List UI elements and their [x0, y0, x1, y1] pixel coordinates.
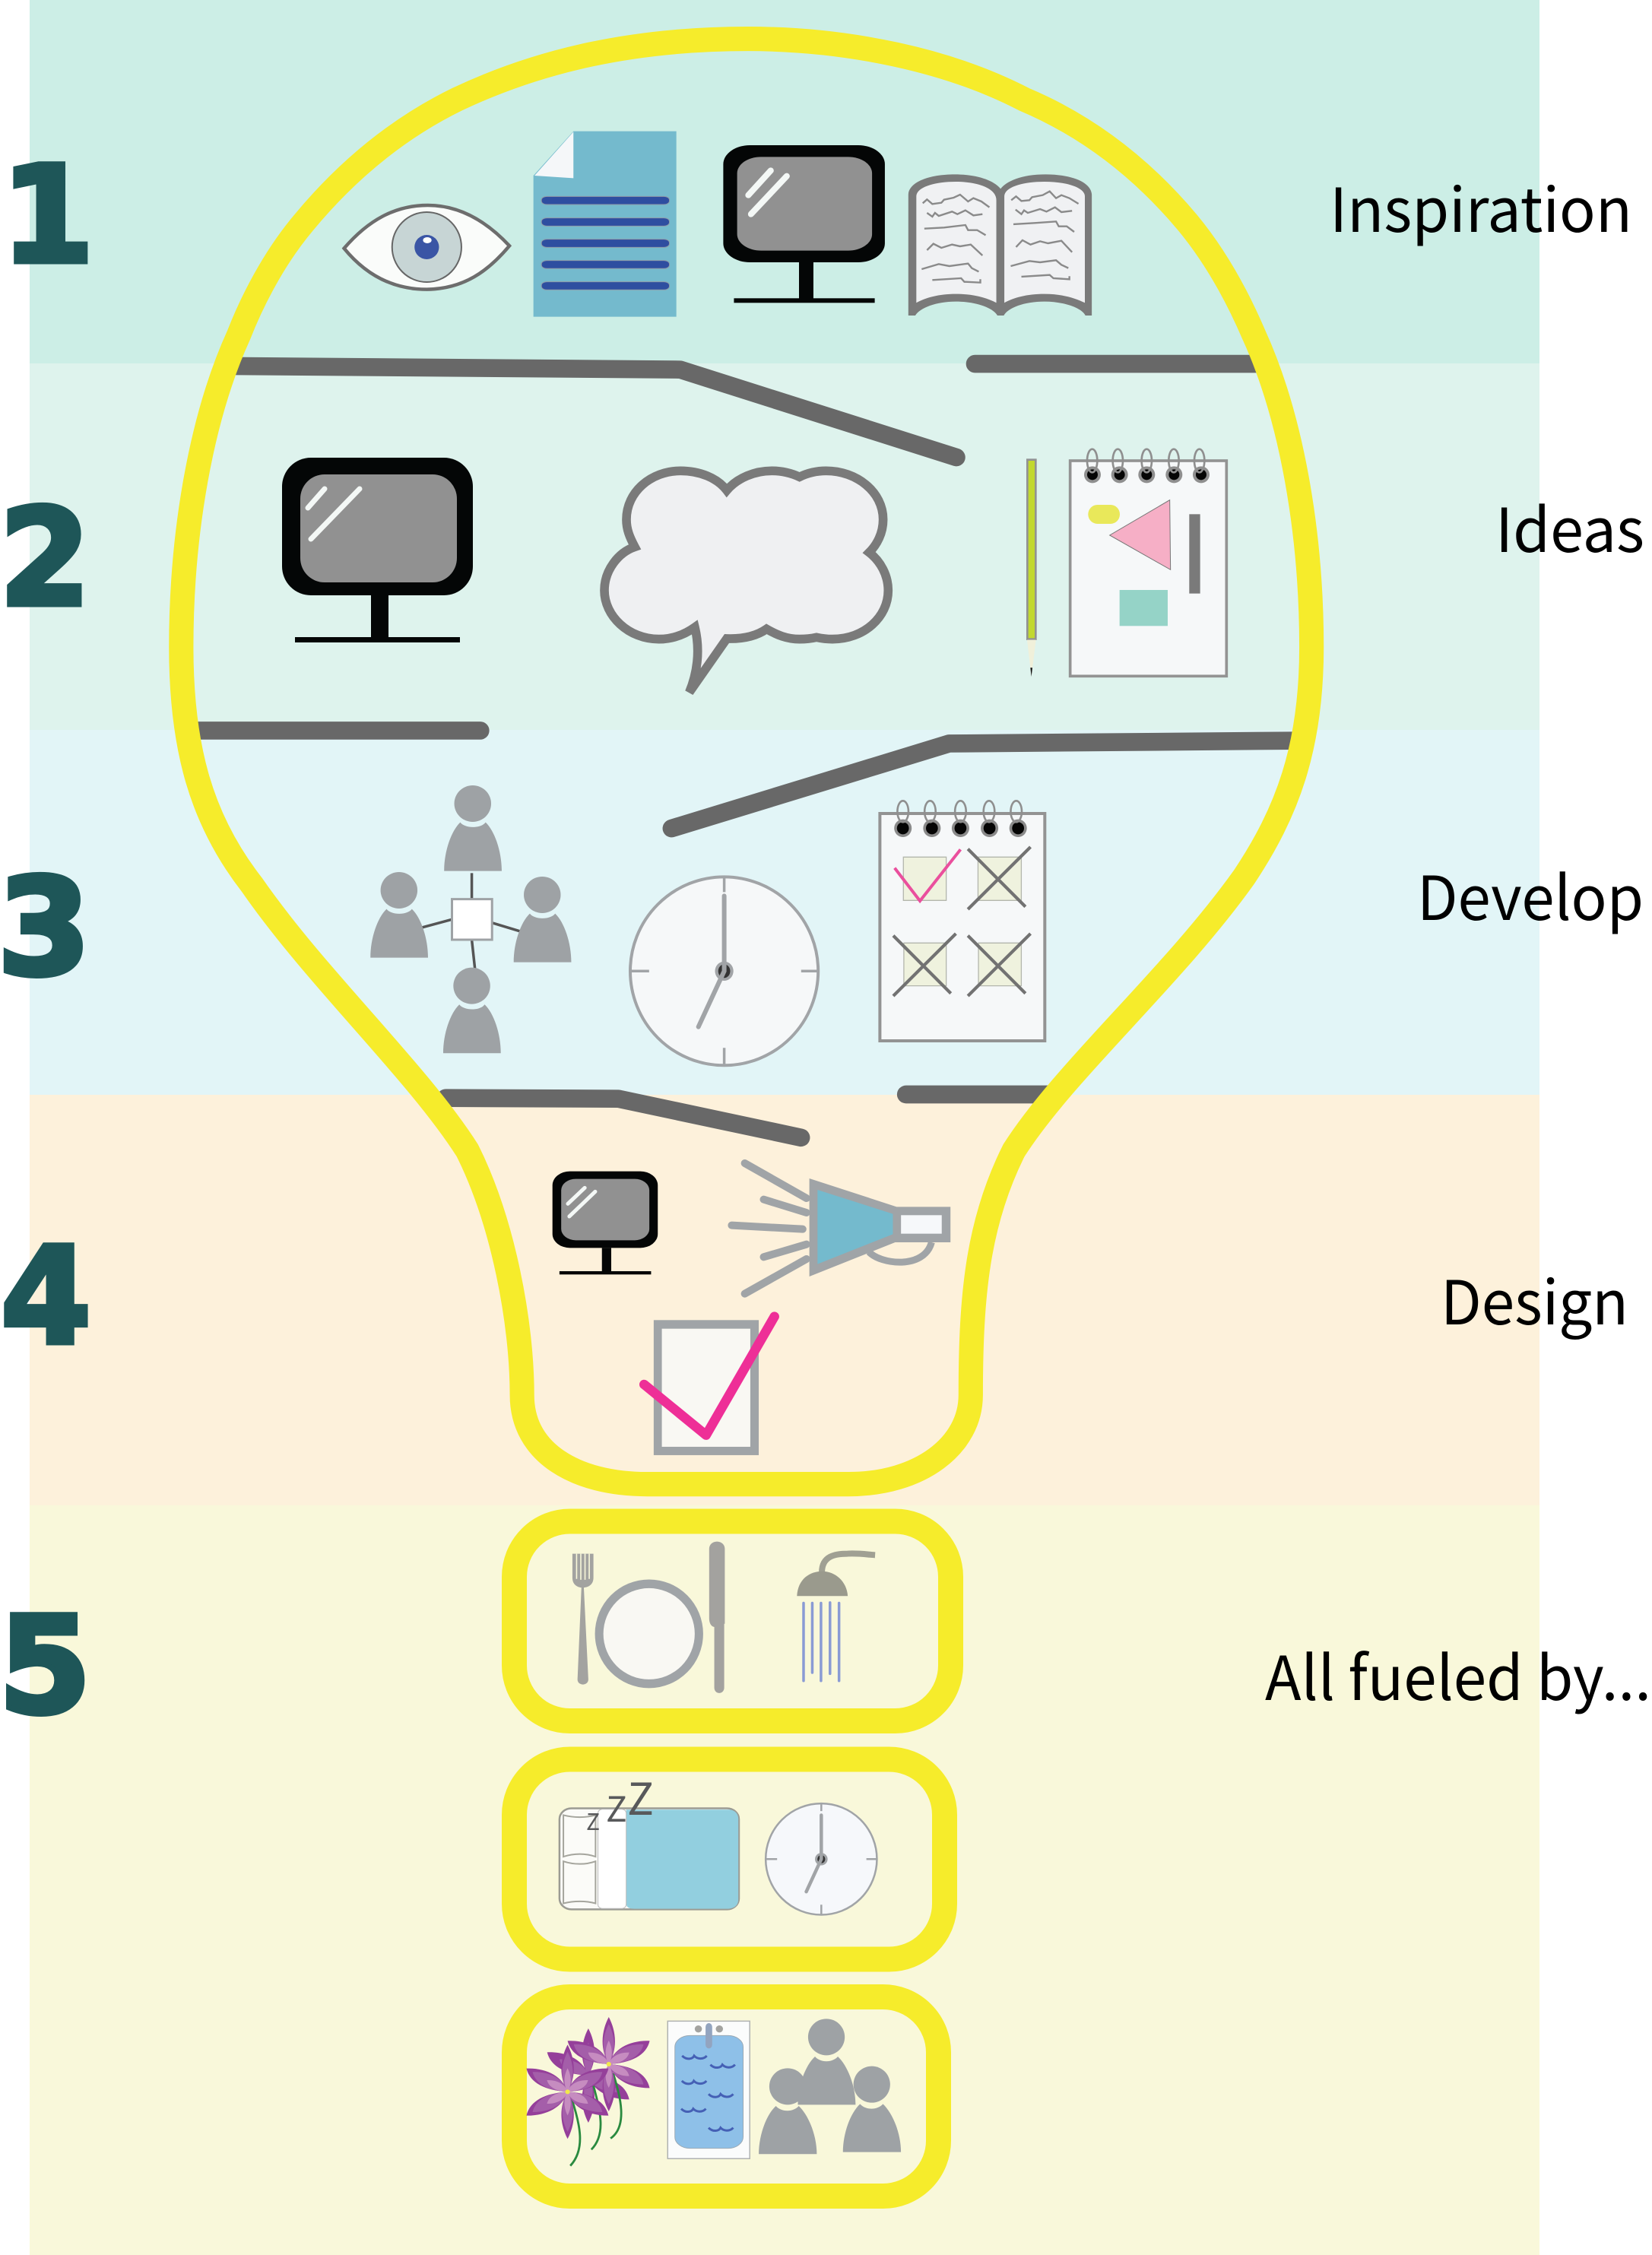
section 4 icons [553, 1163, 950, 1455]
fuel pill: relaxation [514, 1997, 938, 2196]
icon: monitor [553, 1172, 658, 1274]
section 2 icons: pencil and notepad [1027, 449, 1226, 677]
icon: document [534, 132, 677, 317]
icon: sleeping zzz: Z [586, 1803, 600, 1837]
band: fuel background [30, 1505, 1539, 2255]
section 2 icon: monitor [282, 458, 473, 642]
number 1: 1 [1, 138, 94, 293]
label: Inspiration: Inspiration [1330, 162, 1632, 250]
band: develop background [30, 730, 1539, 1095]
icon: knife [709, 1542, 725, 1693]
icon: checklist notepad [880, 801, 1045, 1041]
section 3 icons [370, 785, 1045, 1065]
icon: monitor [723, 145, 885, 303]
section 5 icons: meals, shower, sleep, clock [560, 1542, 877, 1915]
label: All fueled by...: All fueled by... [1265, 1630, 1651, 1718]
icon: eye [344, 205, 509, 290]
band: inspiration background [30, 0, 1539, 363]
label: Design: Design [1441, 1254, 1628, 1343]
icon: bed [560, 1809, 739, 1909]
icon: plate [595, 1579, 703, 1688]
icon: sleeping zzz [586, 1764, 654, 1837]
section 1 icons [344, 132, 1092, 317]
band: design background [30, 1095, 1539, 1505]
icon: clock [630, 877, 819, 1065]
icon: sleeping zzz: Z [606, 1782, 627, 1832]
icon: team network [370, 785, 571, 1053]
icon: pencil [1027, 460, 1036, 677]
number 5: 5 [0, 1588, 91, 1744]
band: ideas background [30, 363, 1539, 730]
icon: sleeping zzz: Z [627, 1764, 654, 1828]
number 2: 2 [0, 480, 90, 636]
label: Ideas: Ideas [1495, 482, 1644, 570]
label: Develop: Develop [1417, 850, 1644, 938]
section 5 icons: flowers, bath, people [526, 2017, 901, 2166]
icon: clock [766, 1803, 877, 1915]
icon: group of people [759, 2019, 901, 2154]
icon: open book [908, 174, 1092, 316]
icon: notepad with shapes [1070, 449, 1226, 676]
icon: megaphone [731, 1163, 950, 1294]
fuel pill: food and shower [514, 1521, 950, 1721]
icon: flowers [526, 2017, 650, 2166]
section 2 icon: thought cloud [604, 471, 888, 693]
number 3: 3 [0, 850, 90, 1006]
icon: checked box [644, 1317, 775, 1455]
lightbulb outline [181, 39, 1311, 1484]
dividers: gray filament bars [194, 364, 1294, 1137]
fuel pill: sleep [514, 1759, 944, 1959]
icon: shower [797, 1553, 875, 1681]
number 4: 4 [1, 1219, 91, 1375]
icon: fork [572, 1554, 594, 1685]
icon: bathtub [667, 2021, 750, 2158]
